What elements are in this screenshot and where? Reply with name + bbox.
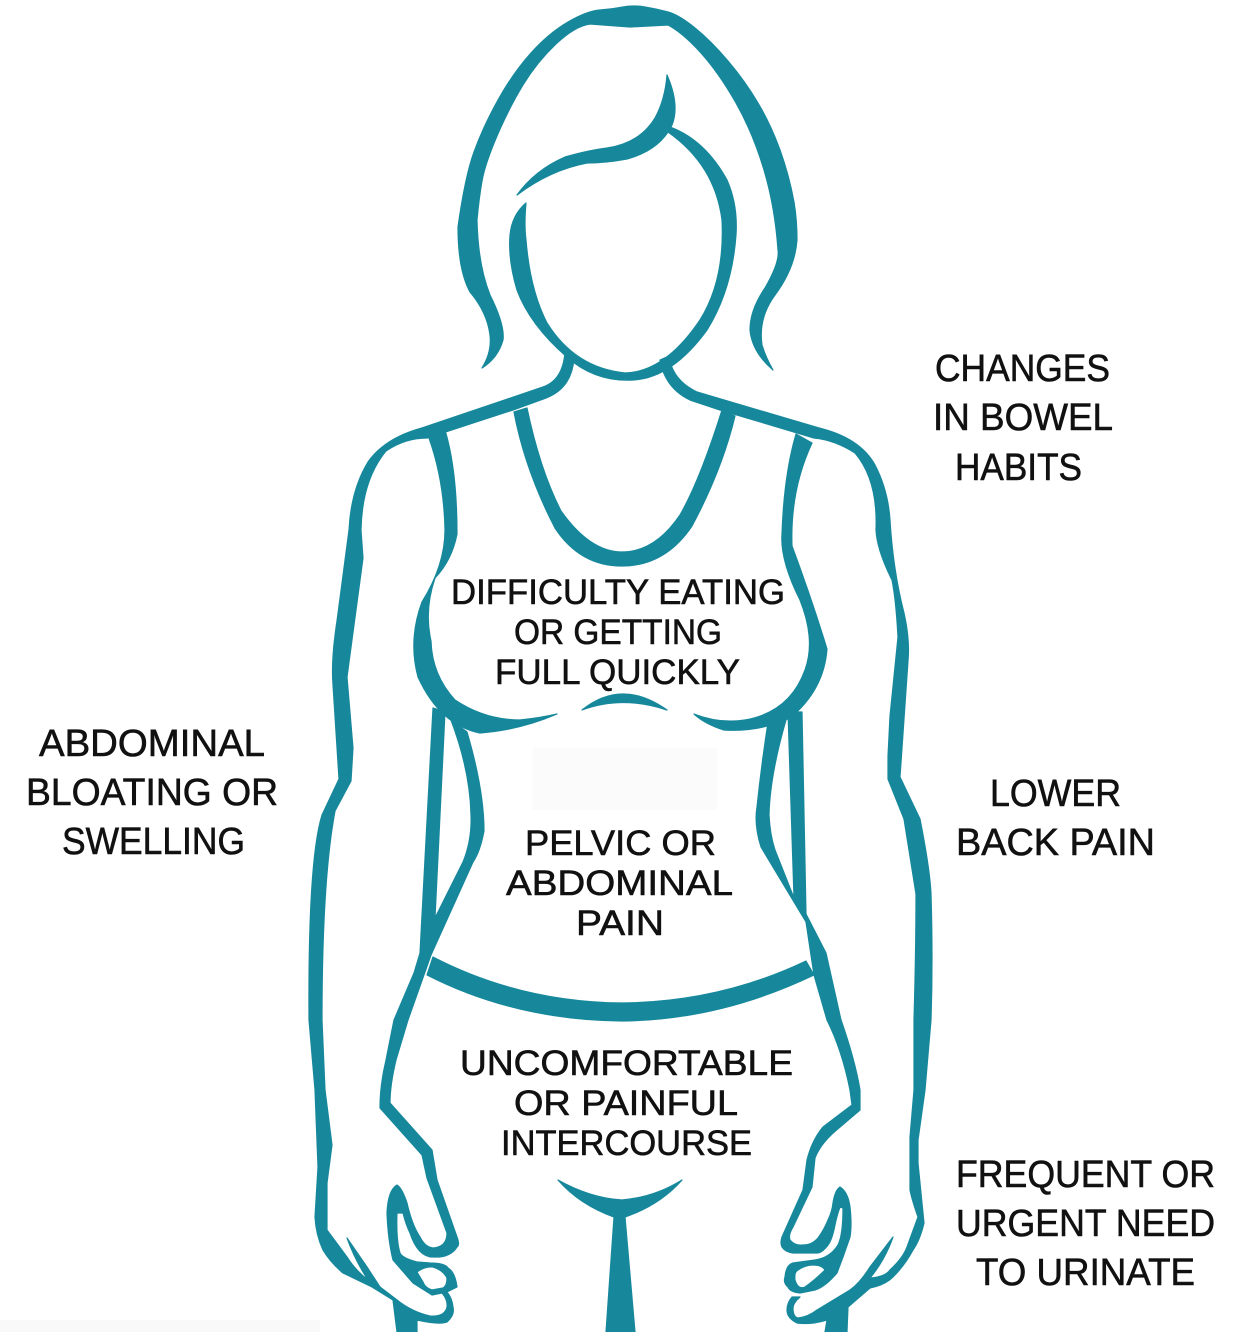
- neck and left shoulder: [422, 352, 574, 438]
- label: uncomfortable or painful intercourse: OR PAINFUL: [514, 1084, 738, 1123]
- label: abdominal bloating or swelling: [26, 723, 278, 863]
- right arm and lower finger: [787, 428, 932, 1332]
- label: difficulty eating or getting full quickly: OR GETTING: [514, 613, 722, 652]
- waistband: [427, 957, 814, 1021]
- tank top strap and bust left: [414, 430, 557, 733]
- neckline: [514, 408, 735, 566]
- figure: woman outline: [309, 6, 932, 1332]
- label: difficulty eating or getting full quickly: DIFFICULTY EATING: [451, 573, 785, 612]
- label: pelvic or abdominal pain: PAIN: [576, 904, 664, 943]
- label: pelvic or abdominal pain: [506, 824, 733, 943]
- label: abdominal bloating or swelling: ABDOMINAL: [39, 723, 265, 765]
- label: lower back pain: LOWER: [990, 773, 1121, 815]
- label: changes in bowel habits: CHANGES: [935, 348, 1110, 390]
- left waist: [394, 708, 484, 1020]
- face: [510, 127, 736, 380]
- label: uncomfortable or painful intercourse: UNCOMFORTABLE: [460, 1044, 793, 1083]
- label: difficulty eating or getting full quickly: [451, 573, 785, 692]
- label: frequent or urgent need to urinate: TO URINATE: [976, 1252, 1195, 1294]
- label: difficulty eating or getting full quickly: FULL QUICKLY: [495, 653, 740, 692]
- tank top strap and bust right: [694, 434, 827, 730]
- right hip and fingers: [781, 1020, 860, 1293]
- right waist: [756, 712, 841, 1020]
- label: frequent or urgent need to urinate: [956, 1154, 1215, 1294]
- label: uncomfortable or painful intercourse: INTERCOURSE: [501, 1124, 752, 1163]
- crotch: [558, 1180, 682, 1332]
- neck and right shoulder: [660, 356, 819, 438]
- label: pelvic or abdominal pain: ABDOMINAL: [506, 864, 733, 903]
- label: uncomfortable or painful intercourse: [460, 1044, 793, 1163]
- label: pelvic or abdominal pain: PELVIC OR: [525, 824, 716, 863]
- label: frequent or urgent need to urinate: FREQUENT OR: [956, 1154, 1215, 1196]
- label: changes in bowel habits: HABITS: [955, 447, 1082, 489]
- label: frequent or urgent need to urinate: URGENT NEED: [956, 1203, 1215, 1245]
- label: abdominal bloating or swelling: SWELLING: [62, 821, 245, 863]
- label: abdominal bloating or swelling: BLOATING OR: [26, 772, 278, 814]
- left arm and lower finger: [309, 428, 453, 1332]
- label: changes in bowel habits: IN BOWEL: [933, 397, 1113, 439]
- label: lower back pain: BACK PAIN: [956, 822, 1155, 864]
- hair: [458, 6, 797, 370]
- label: lower back pain: [956, 773, 1155, 864]
- bust centre arc: [582, 694, 667, 710]
- hair fringe: [517, 75, 675, 195]
- left hip and fingers: [380, 1020, 458, 1295]
- label: changes in bowel habits: [933, 348, 1113, 489]
